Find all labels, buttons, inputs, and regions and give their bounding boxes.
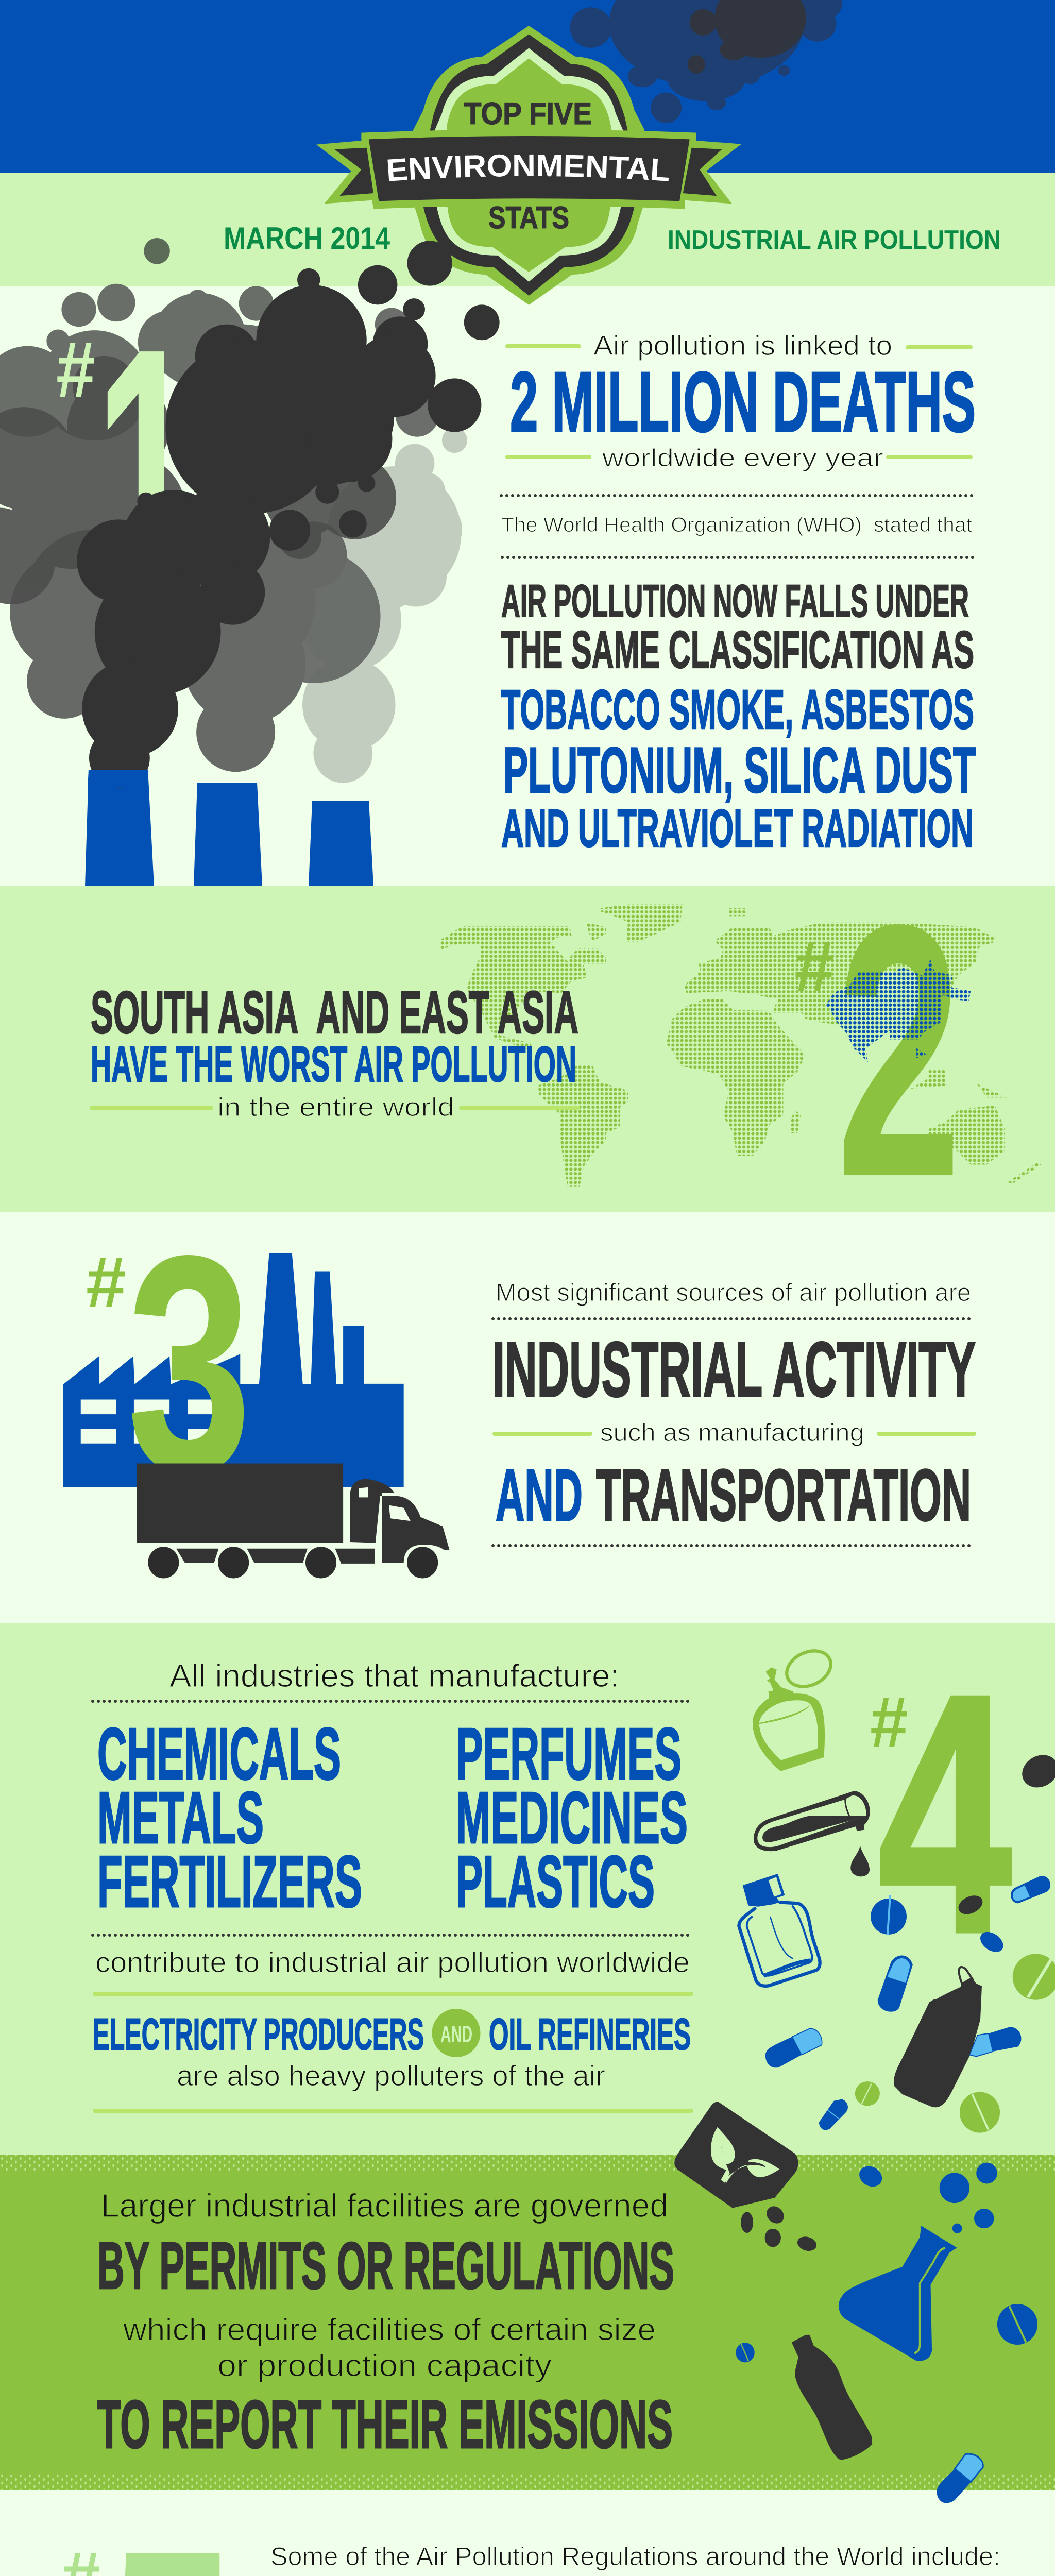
hash sign: # (86, 1242, 126, 1322)
panel: stat 1 (0, 238, 976, 886)
icon: three blue chimneys (85, 770, 373, 886)
headline: worst air pollution: HAVE THE WORST AIR POLLUTION (91, 1036, 576, 1092)
digit 3: 3 (127, 1192, 252, 1537)
icon: and circle (432, 2009, 480, 2057)
text: worldwide every year: worldwide every year (602, 445, 883, 472)
icon: factory (63, 1253, 404, 1487)
number 2 (794, 851, 962, 1251)
digit 1: 1 (95, 274, 199, 674)
chart: highlighted Asia dots (826, 959, 971, 1062)
icon: seeds (741, 2204, 818, 2252)
badge text: environmental: ENVIRONMENTAL (387, 155, 669, 181)
icon: leaf box (674, 2102, 798, 2208)
headline: and transportation: AND (496, 1454, 583, 1536)
headline: electricity producers and oil refineries: OIL REFINERIES (489, 2010, 691, 2059)
headline: substances (501, 678, 976, 858)
chart: dotted world map (440, 904, 1041, 1187)
text: such as manufacturing: such as manufacturing (600, 1419, 864, 1447)
text: which require facilities: which require facilities of certain size (123, 2312, 656, 2347)
panel: stat 2 (91, 851, 1041, 1251)
icon: capsule (765, 2028, 822, 2067)
number 4 (870, 1624, 1013, 2004)
panel: permits and regulations (97, 1999, 1037, 2503)
list: industries right column: MEDICINES (456, 1777, 688, 1859)
hash sign: # (794, 926, 835, 1006)
icon: capsule bottom (937, 2454, 983, 2503)
text: in the entire world: in the entire world (217, 1093, 454, 1122)
icon: pills and tablets (871, 1749, 1055, 2012)
repaint chimney rim over smoke (88, 770, 149, 788)
text: or production capacity: or production capacity (217, 2348, 552, 2383)
text: contribute: contribute to industrial air pollution worldwide (95, 1946, 690, 1978)
icon: smoke plume (0, 238, 467, 783)
headline: classification (501, 575, 974, 679)
icon: perfume bottle green (753, 1644, 837, 1771)
list: industries right column: PLASTICS (456, 1841, 655, 1923)
digit 2: 2 (836, 851, 962, 1251)
icon: blue tablets (736, 2304, 1037, 2362)
icon: truck (137, 1464, 449, 1578)
number 5 (61, 2478, 235, 2576)
icon: oil drop (850, 1845, 870, 1876)
number 3 (86, 1192, 252, 1537)
text: most significant sources: Most significant sources of air pollution are (496, 1279, 971, 1307)
icon: capsule behind bag (969, 2027, 1021, 2057)
badge: top five environmental stats (316, 26, 742, 305)
list: industries left column (97, 1713, 362, 1923)
list: industries right column: PERFUMES (456, 1713, 682, 1795)
badge text: top five: TOP FIVE (464, 96, 592, 131)
panel: stat 3 (63, 1192, 976, 1578)
icon: and circle: AND (440, 2021, 472, 2047)
icon: bag lower body (894, 1999, 980, 2107)
text: all industries that manufacture: All industries that manufacture: (169, 1658, 619, 1694)
date label: MARCH 2014 (224, 221, 390, 256)
text: heavy polluters: are also heavy polluters of the air (177, 2059, 605, 2092)
header smoke cloud (570, 0, 842, 123)
headline: south asia and east asia: SOUTH ASIA AND EAST ASIA (91, 979, 578, 1046)
hash sign: # (870, 1682, 908, 1762)
headline: and transportation (496, 1454, 971, 1536)
headline: electricity producers and oil refineries: ELECTRICITY PRODUCERS (93, 2010, 424, 2059)
list: industries left column: METALS (97, 1777, 264, 1859)
icon: plastic bottle (792, 2335, 872, 2460)
icon: test tube (754, 1791, 870, 1851)
list: industries left column: FERTILIZERS (97, 1841, 362, 1923)
panel: stat 5 (0, 2478, 1010, 2576)
icon: flask (839, 2226, 957, 2361)
icons: bottles and pills upper group (739, 1644, 1055, 2012)
list: industries left column: CHEMICALS (97, 1713, 341, 1795)
panel: stat 4 (93, 1624, 1055, 2111)
icon: perfume bottle blue (739, 1874, 820, 1986)
icon: garbage bag bottle (894, 1967, 982, 2107)
text: WHO statement: The World Health Organization (WHO) stated that (501, 514, 972, 536)
text: larger industrial facilities: Larger industrial facilities are governed (101, 2187, 668, 2224)
text: air pollution is linked to: Air pollution is linked to (593, 330, 892, 361)
hash sign: # (56, 326, 95, 414)
badge text: stats: STATS (488, 200, 569, 235)
icons: flask bag bottle and pills (674, 1999, 1037, 2503)
topic label: INDUSTRIAL AIR POLLUTION (668, 225, 1001, 255)
icon: dark smoke plume (77, 241, 500, 788)
icon: green tablets (855, 2081, 1000, 2133)
number 1 (56, 274, 199, 674)
list: industries right column (456, 1713, 688, 1923)
text: regulations intro: Some of the Air Pollution Regulations around the World include: (270, 2542, 1000, 2571)
icon: small capsule (819, 2099, 848, 2130)
icon: bubbles (857, 2163, 997, 2233)
